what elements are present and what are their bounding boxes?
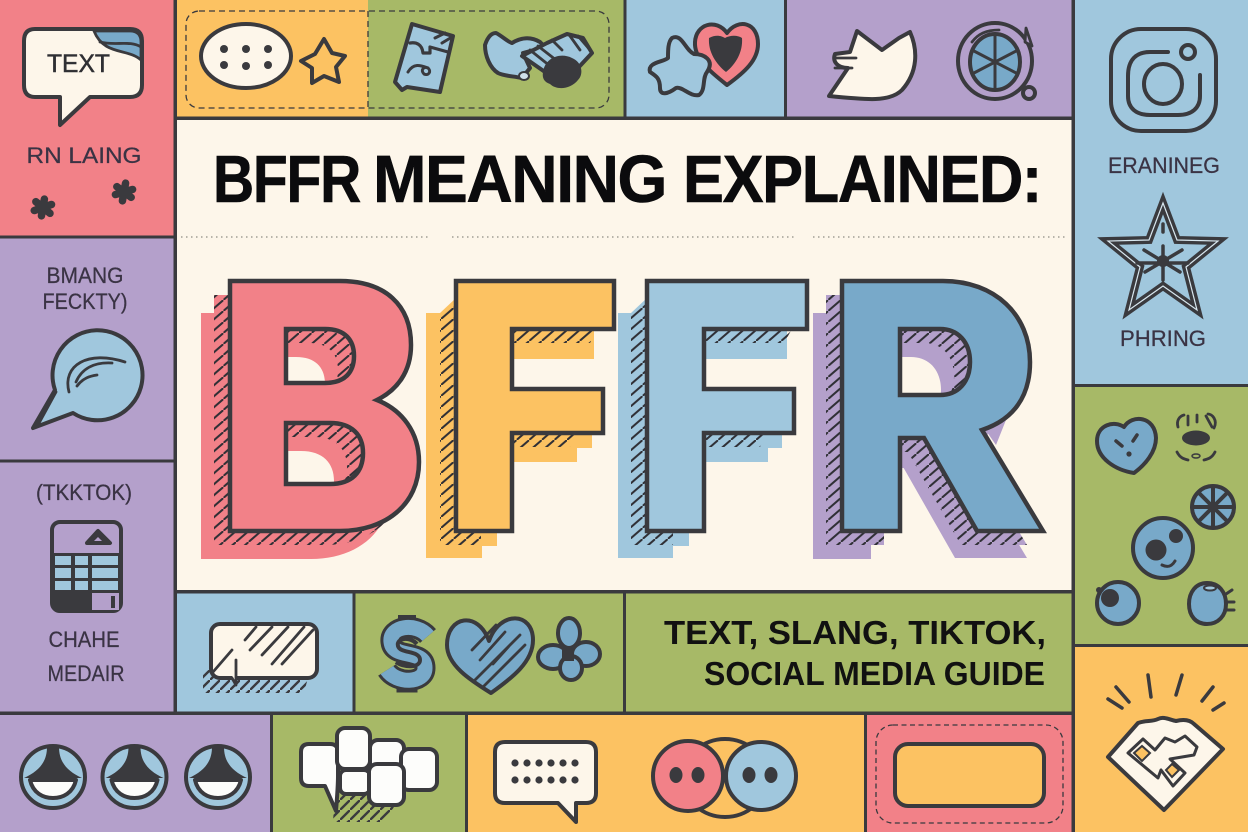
panel: right blue [1073,0,1248,385]
label: PHRING: PHRING [1120,326,1206,351]
panel: green bubble cluster [271,713,466,832]
icon: nose mark [1177,414,1215,460]
icon: wheel badge [958,23,1035,99]
icon: face two [102,746,166,808]
icon: asterisk right [115,182,133,202]
panel: right green faces [1073,385,1248,645]
icon: white diamond [1108,718,1223,810]
icon: TEXT speech bubble [24,29,142,125]
panel: purple faces [0,713,271,832]
panel: yellow chat [466,713,865,832]
icon: blue heart face [1097,419,1156,473]
icon: dotted speech bubble [495,742,596,822]
icon: clover [538,618,600,680]
label: BMANG FECKTY: BMANG [46,263,124,288]
icon: blue star outline [650,37,710,95]
panel: red frame [865,713,1073,832]
panel: blue star and heart [625,0,785,118]
icon: face one [21,746,85,808]
label: BMANG FECKTY [42,263,128,314]
icon: outlined star [1108,203,1218,310]
panel: top yellow and green strip [176,0,625,118]
icon: face three [186,746,250,808]
panel: right yellow sparkle [1073,645,1248,832]
panel: purple calculator [0,461,175,713]
icon: camera [1111,29,1216,131]
icon: blue heart [447,618,533,693]
icon: sparkle rays [1108,675,1224,710]
letter B [201,281,419,559]
icon: white bird [829,31,915,99]
heading: BFFR meaning explained [213,142,1041,217]
panel: subtitle [624,592,1073,713]
panel: red text bubble [0,0,175,237]
icon: yellow star [301,39,345,83]
icon: right eye [1189,583,1234,624]
letter R [813,281,1043,559]
heading: BFFR meaning explained: BFFR [213,142,361,217]
label: CHAHE MEDAIR [48,627,124,686]
icon: cluster of bubbles [301,728,437,822]
label: BMANG FECKTY: FECKTY) [42,289,128,314]
icon: asterisk left [34,198,52,217]
panel: purple bird and wheel [785,0,1073,118]
icon: left eye [1096,582,1139,624]
icon: yellow rounded box [895,744,1044,806]
icon: dollar sign [387,615,428,691]
icon: blue bird with dark blob [485,33,592,88]
label: RN LAING: RN LAING [26,143,142,168]
panel: purple bubble [0,237,175,461]
heading: BFFR meaning explained: EXPLAINED: [683,142,1041,217]
text: subtitle line one: TEXT, SLANG, TIKTOK, [664,614,1046,651]
heading: BFFR meaning explained: MEANING [373,142,666,217]
icon: two overlapping faces [653,739,796,817]
icon: pink heart [695,24,758,85]
label: TKKTOK: (TKKTOK) [36,480,132,505]
icon: blue torn card [395,24,453,92]
icon: round speech bubble [33,330,143,428]
icon: TEXT speech bubble: TEXT [47,50,110,78]
icon: phone grid [52,522,121,612]
icon: wheel [1192,486,1234,528]
panel: green icons row [354,592,624,713]
icon: big face [1133,518,1193,578]
icon: chat oval [201,24,291,88]
letter F yellow [426,281,614,558]
label: ERANINEG: ERANINEG [1108,153,1220,178]
letter F blue [618,281,807,558]
label: CHAHE MEDAIR: CHAHE [48,627,120,652]
icon: rectangular bubble [203,624,317,693]
text: subtitle line two: SOCIAL MEDIA GUIDE [704,655,1045,692]
panel: main title area [176,118,1073,592]
panel: blue hatched bubble [176,592,354,713]
label: CHAHE MEDAIR: MEDAIR [48,661,124,686]
